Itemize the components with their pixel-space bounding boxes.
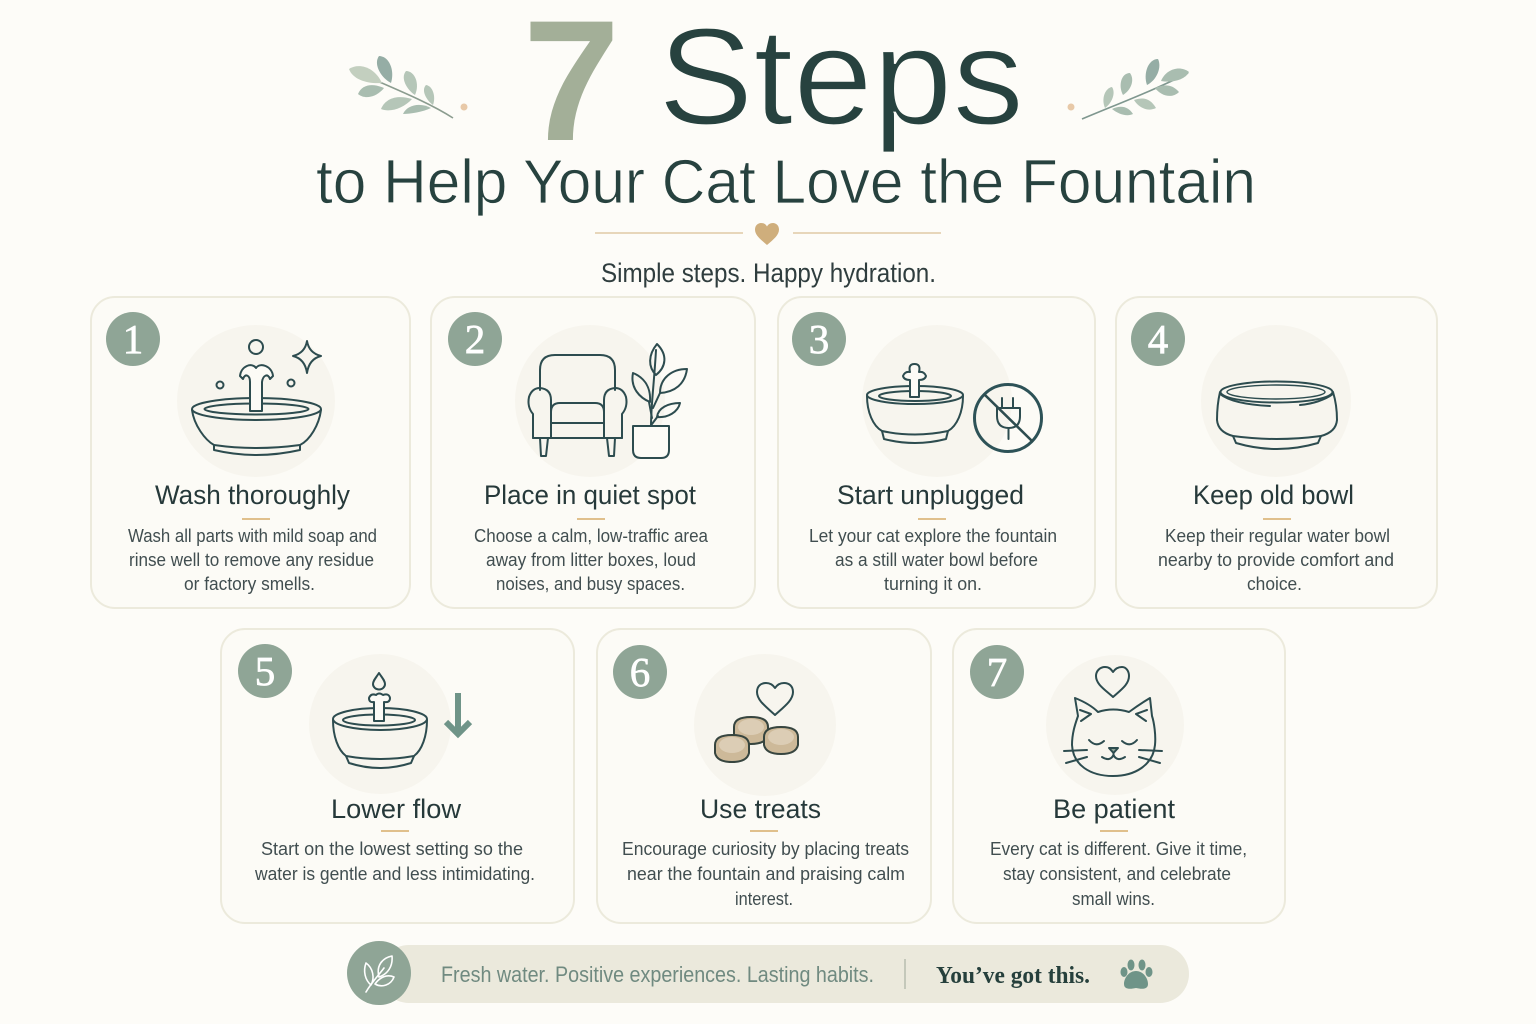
description (809, 526, 1057, 594)
number badge 6 (613, 645, 667, 699)
description (622, 839, 909, 909)
icon: down arrow (446, 693, 470, 734)
icon: leaf in circle (347, 941, 411, 1005)
description: or factory smells. (184, 574, 315, 594)
panel: step 3 start unplugged (778, 297, 1095, 608)
number badge 1 (106, 312, 160, 366)
heading: Use treats (700, 794, 821, 824)
icon: sleeping cat face (1064, 698, 1162, 776)
heading: Start unplugged (837, 480, 1024, 510)
description: as a still water bowl before (835, 550, 1038, 570)
description: Keep their regular water bowl (1165, 526, 1390, 546)
number badge 6: 6 (630, 649, 650, 695)
number badge 3: 3 (809, 316, 829, 362)
description (474, 526, 709, 594)
title word Steps: Steps (658, 0, 1024, 154)
icon: washed fountain bowl with sparkle (192, 340, 321, 455)
panel: step 1 wash thoroughly (91, 297, 410, 608)
number badge 3 (792, 312, 846, 366)
description: Wash all parts with mild soap and (128, 526, 377, 546)
footer banner (347, 941, 1189, 1005)
number badge 4 (1131, 312, 1185, 366)
decorative dot left (460, 104, 468, 110)
icon: fountain bowl (867, 364, 963, 443)
icon: heart above cat (1096, 667, 1129, 697)
description (1158, 526, 1394, 594)
footer message: Fresh water. Positive experiences. Lasting habits. (441, 962, 874, 987)
icon: heart (757, 683, 793, 715)
tagline: Simple steps. Happy hydration. (601, 258, 936, 288)
number badge 4: 4 (1148, 316, 1168, 362)
panel: step 7 be patient (953, 629, 1285, 923)
icon: no plug symbol (974, 384, 1042, 452)
decorative dot right (1068, 104, 1074, 110)
number badge 2: 2 (465, 316, 485, 362)
decorative leaf sprig right (1082, 59, 1189, 119)
number badge 5 (238, 644, 292, 698)
description: rinse well to remove any residue (129, 550, 374, 570)
icon: armchair (528, 355, 626, 456)
icon: fountain with low drop (333, 673, 427, 768)
description: Choose a calm, low-traffic area (474, 526, 709, 546)
footer encouragement: You’ve got this. (936, 963, 1090, 989)
heading: Keep old bowl (1193, 480, 1354, 510)
description: small wins. (1072, 889, 1155, 909)
panel: step 6 use treats (597, 629, 931, 923)
decorative leaf sprig left (349, 56, 453, 118)
description: noises, and busy spaces. (496, 574, 685, 594)
description (128, 526, 377, 594)
subtitle: to Help Your Cat Love the Fountain (316, 148, 1256, 217)
heading: Lower flow (331, 794, 461, 824)
description: water is gentle and less intimidating. (254, 864, 535, 884)
number badge 7: 7 (987, 649, 1007, 695)
description: stay consistent, and celebrate (1003, 864, 1231, 884)
title (316, 0, 1256, 217)
icon: plain water bowl (1217, 382, 1337, 449)
description: choice. (1247, 574, 1302, 594)
description: away from litter boxes, loud (486, 550, 696, 570)
description: interest. (735, 889, 793, 909)
description: Start on the lowest setting so the (261, 839, 523, 859)
description (990, 839, 1247, 909)
panel: step 2 place in quiet spot (431, 297, 755, 608)
divider with heart (595, 223, 941, 245)
icon: treats (715, 717, 798, 762)
description: Let your cat explore the fountain (809, 526, 1057, 546)
description: near the fountain and praising calm (627, 864, 905, 884)
description: nearby to provide comfort and (1158, 550, 1394, 570)
panel: step 5 lower flow (221, 629, 574, 923)
heading: Wash thoroughly (155, 480, 350, 510)
description: turning it on. (884, 574, 982, 594)
number badge 1: 1 (123, 316, 143, 362)
number badge 5: 5 (255, 648, 275, 694)
heading: Place in quiet spot (484, 480, 696, 510)
number badge 7 (970, 645, 1024, 699)
description: Encourage curiosity by placing treats (622, 839, 909, 859)
description: Every cat is different. Give it time, (990, 839, 1247, 859)
icon: paw print (1120, 960, 1152, 989)
description (254, 839, 535, 884)
heading: Be patient (1053, 794, 1175, 824)
number badge 2 (448, 312, 502, 366)
icon: potted plant (632, 344, 687, 458)
panel: step 4 keep old bowl (1116, 297, 1437, 608)
